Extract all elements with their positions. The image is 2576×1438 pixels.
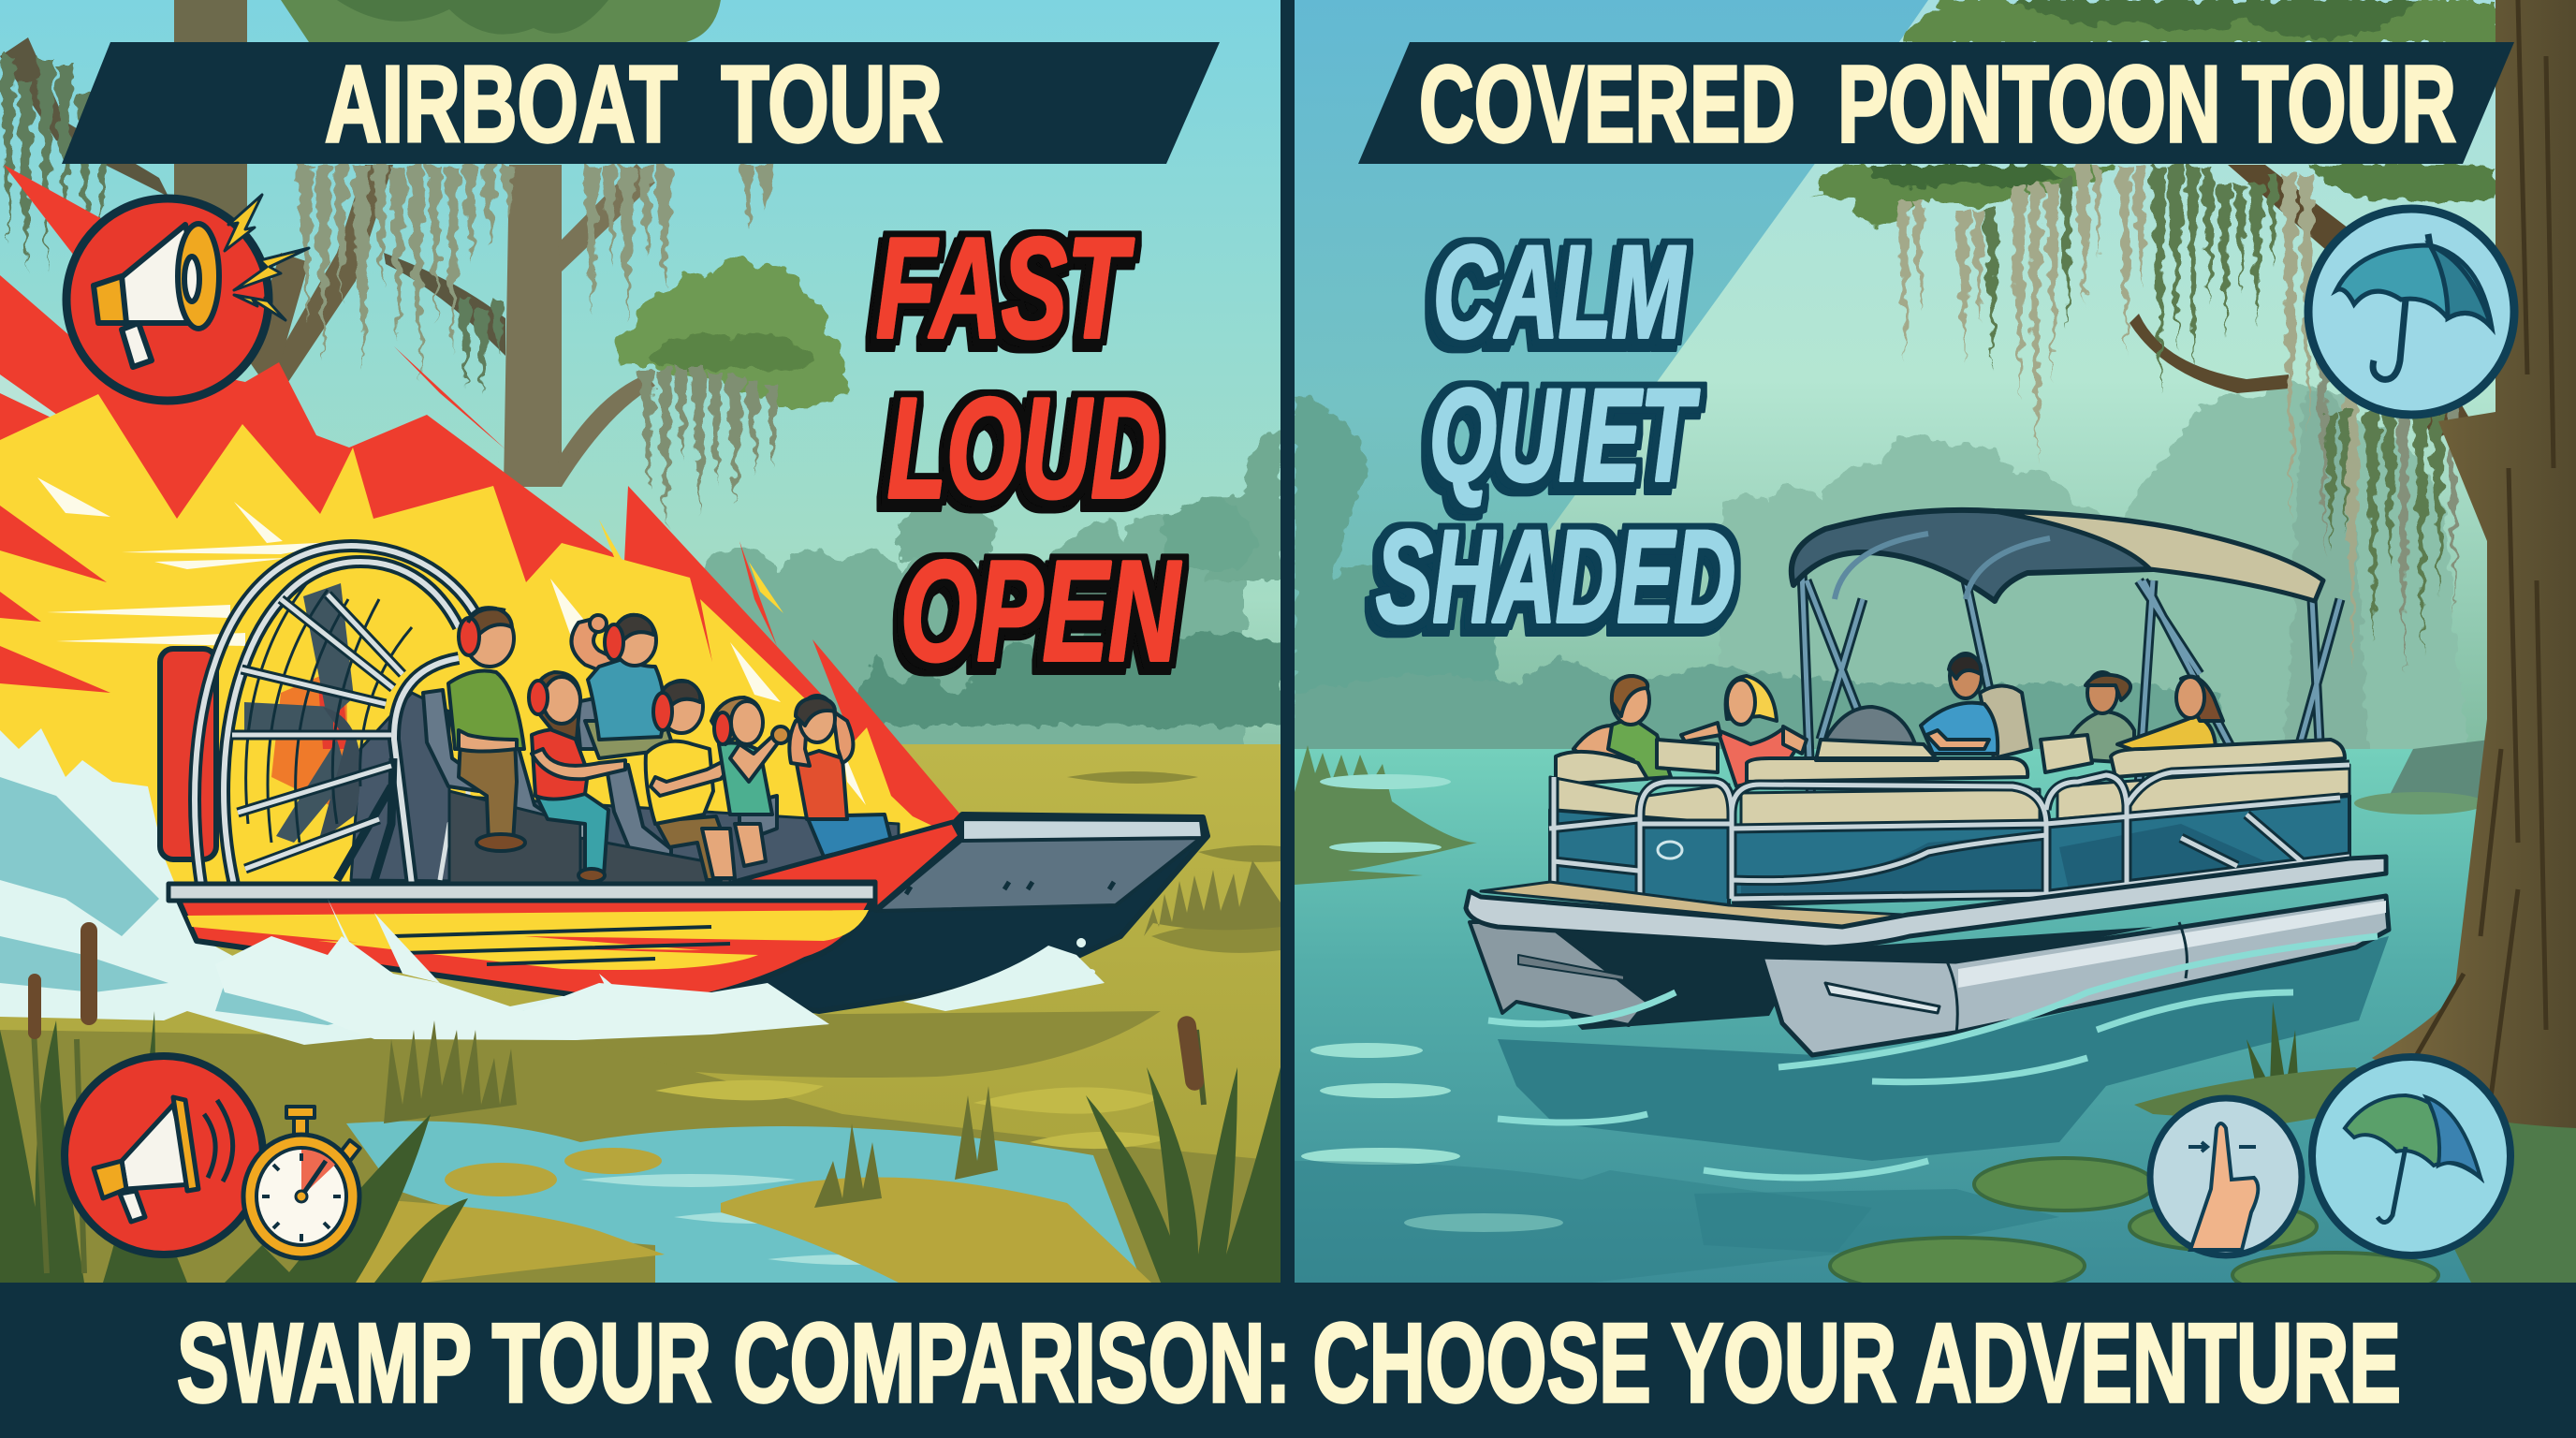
seat bases xyxy=(449,791,730,885)
sky background xyxy=(1295,0,2576,758)
hull spray plumes xyxy=(328,899,655,1020)
tree branches xyxy=(2130,165,2471,440)
word quiet: QUIET xyxy=(1429,361,1700,508)
passenger in yellow shirt xyxy=(646,681,766,880)
icon: umbrella badge top xyxy=(2308,209,2514,415)
distant tree line xyxy=(704,431,1281,744)
bimini canopy inner arcs xyxy=(1835,534,2050,599)
cattails left xyxy=(28,922,97,1273)
logo emblem xyxy=(1658,842,1682,858)
moss bank under icons xyxy=(2134,1067,2396,1123)
dark underside xyxy=(1470,913,2153,1030)
left grass bank xyxy=(1295,745,1477,885)
divider between panels xyxy=(1281,0,1295,1283)
cypress stump xyxy=(2389,740,2490,805)
airboat descriptors xyxy=(876,209,1181,691)
water xyxy=(1295,749,2576,1283)
darker sky wedge xyxy=(1295,0,1928,730)
word open: OPEN xyxy=(900,532,1181,691)
bow grey deck xyxy=(877,838,1201,911)
passenger in green shirt xyxy=(448,608,525,851)
passenger in blue shirt arm raised xyxy=(571,615,674,758)
blue dark swoosh xyxy=(1741,824,2265,903)
footer bar xyxy=(0,1283,2576,1438)
canopy xyxy=(1812,0,2496,227)
spanish moss left xyxy=(0,56,779,529)
water spray behind boat xyxy=(0,728,829,1045)
deck silver rim xyxy=(1466,857,2386,947)
passenger green shirt xyxy=(1573,676,1671,782)
heading: AIRBOAT TOUR xyxy=(325,43,943,165)
passenger coral shirt xyxy=(1681,676,1807,786)
bow silver rim xyxy=(962,819,1203,841)
propeller and fan xyxy=(244,583,360,843)
water dark reflection xyxy=(1295,936,2389,1283)
marsh ground xyxy=(0,744,1281,1159)
hull top rail xyxy=(168,884,875,901)
marsh shading patches xyxy=(0,771,1281,1283)
hull dark streaks xyxy=(393,927,730,964)
flame yellow shard xyxy=(599,520,783,618)
icon: lightning bolts xyxy=(225,195,309,320)
lily pads xyxy=(1830,1158,2438,1298)
rudder panel xyxy=(160,649,216,859)
icon: stopwatch xyxy=(243,1107,360,1258)
fence blue panels xyxy=(1550,796,2349,905)
fence rails silver xyxy=(1549,765,2349,899)
spanish moss right xyxy=(1896,165,2458,674)
flame burst yellow xyxy=(0,394,936,899)
tree foliage clump xyxy=(616,259,850,408)
flame shards xyxy=(394,346,777,646)
canopy poles xyxy=(1802,571,2340,805)
passenger in orange shirt covering ears xyxy=(789,696,891,857)
left pontoon xyxy=(1470,922,1647,1025)
left pontoon strake xyxy=(1518,955,1624,980)
flame white streaks xyxy=(37,477,866,805)
flame red spikes at left xyxy=(0,506,110,693)
front pontoon xyxy=(1762,896,2389,1055)
word fast: FAST xyxy=(876,209,1134,368)
fence rails dark xyxy=(1549,765,2349,899)
bimini canopy top xyxy=(1995,511,2323,601)
pontoon seam xyxy=(1947,922,2187,1034)
pontoon descriptors xyxy=(1376,218,1735,650)
icon: umbrella badge bottom xyxy=(2312,1057,2510,1255)
trunk bark lines xyxy=(2415,0,2554,1105)
banner: airboat tour xyxy=(62,42,1220,165)
front spray over hull xyxy=(215,936,829,1040)
hull side red xyxy=(178,899,872,1006)
passenger in teal shirt xyxy=(711,697,789,814)
wave lines by pontoon xyxy=(1488,936,2378,1178)
panel: airboat tour xyxy=(0,0,1290,1283)
fan grille xyxy=(246,580,412,843)
reeds in marsh xyxy=(384,1020,998,1208)
marsh mud islands xyxy=(300,1148,1151,1283)
cage spokes xyxy=(232,594,402,880)
pontoon boat xyxy=(1466,510,2389,1055)
reed clump by trunk xyxy=(2247,1002,2299,1095)
bow rivets xyxy=(906,882,1114,894)
rear seats xyxy=(1556,735,2345,785)
stream highlights xyxy=(580,1174,861,1265)
airboat xyxy=(160,546,1208,1011)
grass bank at trunk base xyxy=(2378,1095,2576,1283)
icon: megaphone badge bottom xyxy=(65,1056,263,1255)
left tree trunk and canopy xyxy=(0,0,721,487)
icon: quiet finger badge xyxy=(2150,1098,2302,1255)
seats xyxy=(423,690,842,863)
panel: covered pontoon tour xyxy=(1295,0,2576,1298)
pontoon strake xyxy=(1825,983,1939,1013)
driver seat xyxy=(1980,685,2031,758)
flame spike top left xyxy=(4,165,101,255)
marsh light patches xyxy=(655,1080,1160,1150)
distant tree silhouettes xyxy=(1295,383,2471,805)
moss bank xyxy=(2354,792,2485,814)
marsh grass right xyxy=(1144,860,1290,936)
bow dark hull xyxy=(674,814,1208,1011)
right reeds xyxy=(1086,1067,1281,1283)
megaphone cone xyxy=(94,224,219,367)
right tree trunk xyxy=(2372,0,2576,1137)
swamp water stream xyxy=(346,1122,1142,1283)
fence tan panels xyxy=(1550,765,2349,826)
banner: covered pontoon tour xyxy=(1358,42,2514,165)
sky background xyxy=(0,0,1281,749)
bow red panel xyxy=(734,822,960,910)
icon: megaphone badge top xyxy=(66,198,269,401)
passenger in red shirt xyxy=(529,672,625,882)
bimini canopy underside xyxy=(1792,510,2191,601)
flame burst red xyxy=(0,275,959,826)
word shaded: SHADED xyxy=(1376,503,1735,650)
cattail right xyxy=(1177,1015,1205,1105)
hull yellow stripes xyxy=(187,910,869,950)
pontoon highlight xyxy=(1958,901,2386,988)
passenger yellow shirt xyxy=(2117,676,2223,754)
wake drops xyxy=(1055,938,1095,975)
left reeds xyxy=(0,1011,468,1283)
word calm: CALM xyxy=(1433,218,1686,365)
spray teal shadows xyxy=(0,777,524,1025)
sky sliver xyxy=(0,374,56,418)
machinery block xyxy=(351,693,899,885)
passenger driver blue shirt xyxy=(1921,653,1998,754)
passenger grey shirt xyxy=(2059,672,2134,763)
water light ripples xyxy=(1301,774,1563,1232)
bow wake xyxy=(903,946,1105,1011)
console xyxy=(1825,707,1919,758)
word loud: LOUD xyxy=(887,369,1161,528)
cage outer hoops xyxy=(195,546,477,885)
deck tan xyxy=(1481,882,1902,927)
